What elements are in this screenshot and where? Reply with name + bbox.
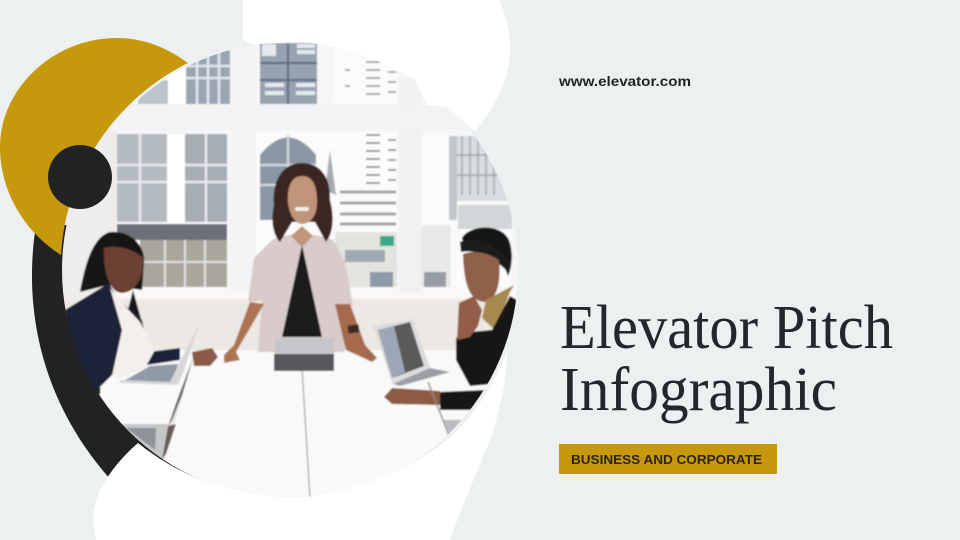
black dot xyxy=(48,145,112,209)
window frames and wall xyxy=(62,130,508,352)
foreground laptop xyxy=(122,358,193,460)
white blob bottom xyxy=(93,352,507,540)
team photo in circle xyxy=(50,30,530,510)
lower left pane xyxy=(117,134,227,287)
website url: www.elevator.com xyxy=(558,73,691,89)
presenter standing xyxy=(224,163,377,363)
subtitle banner: BUSINESS AND CORPORATE xyxy=(571,452,762,467)
white blob top xyxy=(243,0,510,132)
table xyxy=(98,350,488,498)
seated woman left xyxy=(65,232,218,392)
title xyxy=(560,294,893,424)
seated woman right xyxy=(384,227,517,410)
title: Elevator Pitch xyxy=(560,294,893,362)
upper window panes xyxy=(135,43,397,104)
black crescent xyxy=(32,225,220,480)
laptop open on right xyxy=(373,319,462,438)
gold crescent xyxy=(0,38,188,255)
tablet on table xyxy=(274,338,334,371)
lower middle pane xyxy=(256,132,397,293)
lower right pane xyxy=(421,136,512,290)
title: Infographic xyxy=(560,356,837,424)
subtitle banner xyxy=(559,444,777,474)
